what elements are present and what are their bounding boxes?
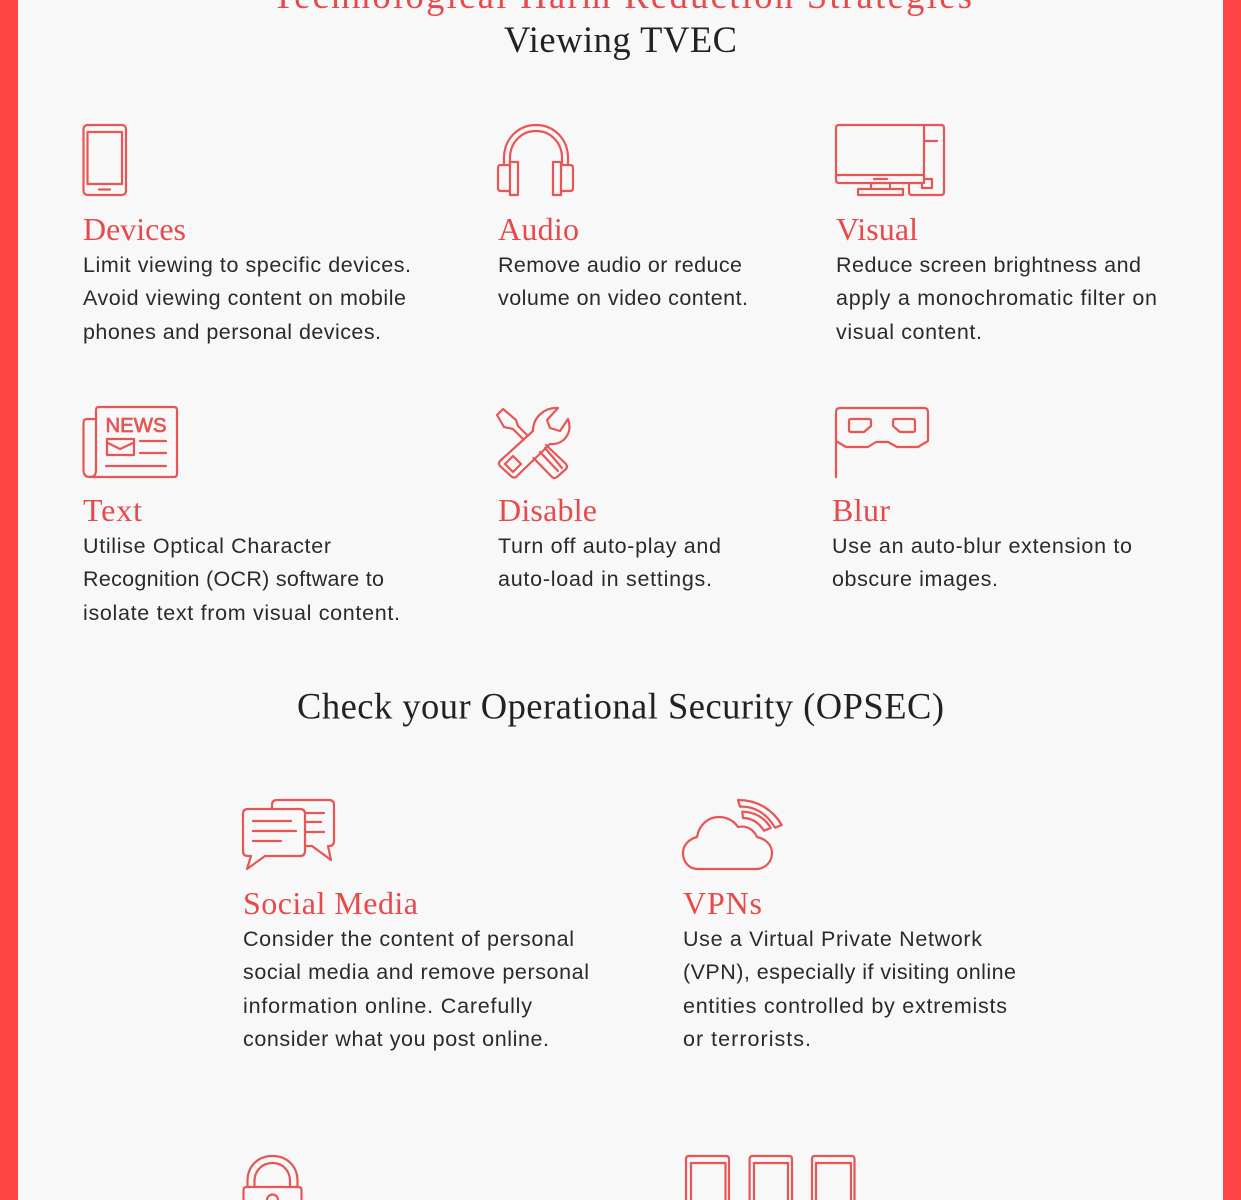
text: visual [836,253,1157,344]
text: text [83,534,400,625]
text: visual: visual content. [836,320,982,344]
text: VPNs: or terrorists. [683,1027,811,1051]
text: disable [498,534,721,591]
text: devices [83,253,411,344]
text: audio [498,253,748,310]
text: disable: Turn off auto-play and [498,534,721,558]
text: text: isolate text from visual content. [83,601,400,625]
icon: three phones [686,1156,854,1200]
text: disable: auto-load in settings. [498,567,712,591]
panel: blur [832,408,1132,591]
text: blur: obscure images. [832,567,998,591]
text: audio: volume on video content. [498,286,748,310]
heading: blur: Blur [832,492,890,528]
text: social media: information online. Carefully [243,994,532,1018]
right red border [1223,0,1241,1200]
icon: mask [836,408,928,477]
text: devices: phones and personal devices. [83,320,381,344]
panel: social media [243,800,589,1051]
icon: speech bubbles [243,800,334,869]
section heading: OPSEC: Check your Operational Security (OPSEC) [297,686,944,726]
icon: padlock [244,1156,302,1200]
text: social media: social media and remove personal [243,960,589,984]
panel: audio [498,125,748,310]
icon: cloud with signal [683,800,782,869]
text: VPNs: Use a Virtual Private Network [683,927,982,951]
heading: VPNs: VPNs [683,885,762,921]
left red border [0,0,18,1200]
heading: devices: Devices [83,211,186,247]
section heading: viewing TVEC: Viewing TVEC [504,19,737,60]
text: VPNs: entities controlled by extremists [683,994,1007,1018]
panel: text [83,407,400,625]
text: social media: consider what you post online. [243,1027,549,1051]
text: VPNs: (VPN), especially if visiting online [683,960,1016,984]
text: audio: Remove audio or reduce [498,253,742,277]
text: visual: Reduce screen brightness and [836,253,1141,277]
text: blur: Use an auto-blur extension to [832,534,1132,558]
panel: visual [836,125,1157,344]
panel: disable [497,408,721,591]
heading: audio: Audio [498,211,579,247]
heading: social media: Social Media [243,885,418,921]
panel: devices [83,125,411,344]
panel: VPNs [683,800,1016,1051]
text: VPNs [683,927,1016,1051]
icon: desktop computer [836,125,944,195]
text: social media: Consider the content of personal [243,927,574,951]
text: text: Recognition (OCR) software to [83,567,384,591]
heading: text: Text [83,492,142,528]
icon: newspaper: NEWS [106,415,166,437]
text: devices: Limit viewing to specific devices. [83,253,411,277]
icon: headphones [498,125,573,195]
icon: tablet device [84,125,126,195]
heading: visual: Visual [836,211,918,247]
icon: crossed tools [497,408,569,478]
icon: newspaper [84,407,177,477]
text: visual: apply a monochromatic filter on [836,286,1157,310]
text: social media [243,927,589,1051]
text: devices: Avoid viewing content on mobile [83,286,406,310]
heading: disable: Disable [498,492,597,528]
text: text: Utilise Optical Character [83,534,331,558]
text: blur [832,534,1132,591]
